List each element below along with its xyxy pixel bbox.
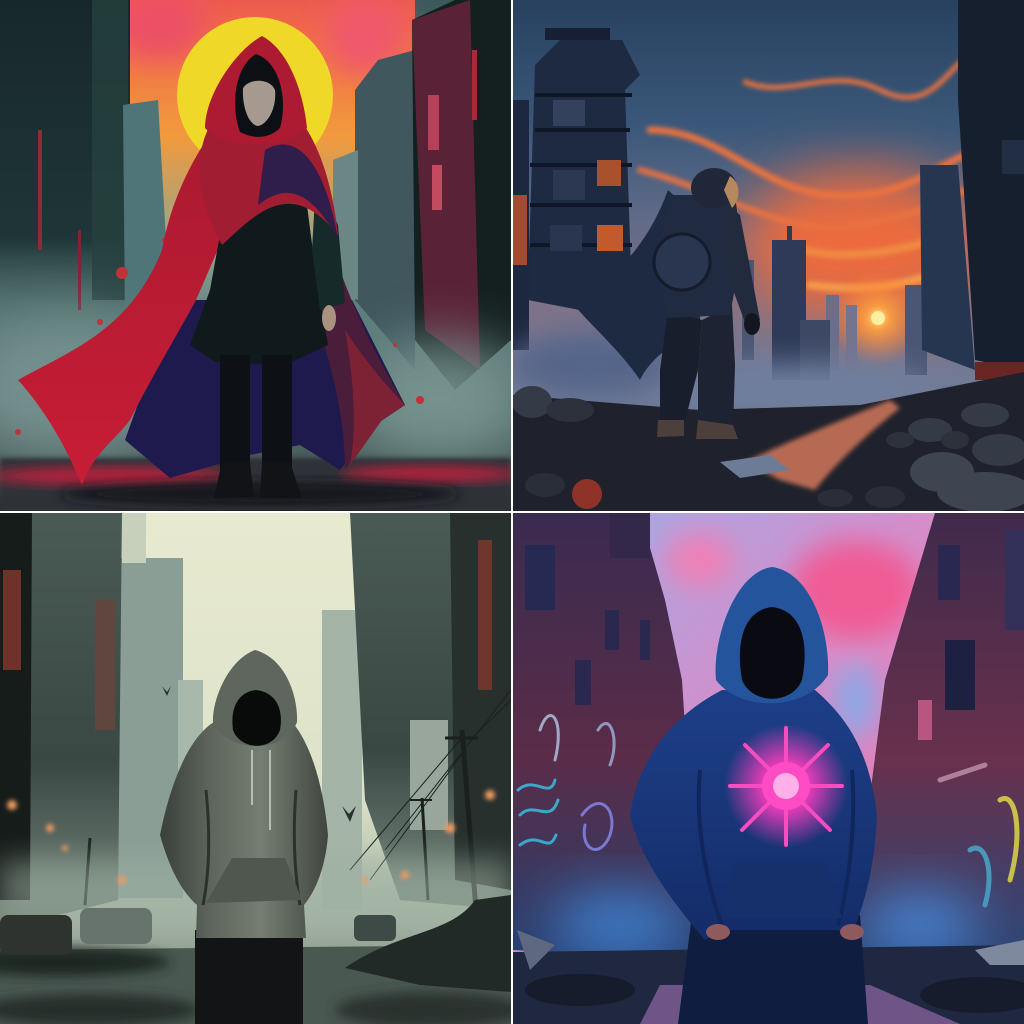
arm creases — [203, 790, 300, 905]
yellow sun disc — [177, 17, 333, 150]
hands in pockets — [706, 924, 864, 940]
hooded figure — [160, 650, 328, 1024]
hood — [716, 567, 828, 703]
arm — [734, 212, 760, 320]
arm — [312, 212, 345, 310]
red cloak sweep left — [18, 146, 219, 485]
panel: grey hoodie in foggy city — [0, 513, 525, 1024]
orange sunset sky — [115, 0, 415, 300]
setting sun — [839, 288, 905, 362]
boots — [657, 420, 684, 437]
hood — [205, 36, 307, 144]
large tower left — [513, 28, 640, 350]
boots — [214, 462, 254, 498]
cape — [568, 190, 700, 380]
street and rubble — [513, 930, 1024, 1024]
dark inner cloak — [125, 300, 405, 478]
hoodie body — [630, 690, 877, 940]
orange sky glow — [740, 170, 980, 320]
left buildings — [0, 513, 122, 930]
wet road — [0, 945, 525, 1024]
paint splatter — [15, 237, 424, 435]
blue mist — [510, 333, 930, 407]
fog band — [0, 860, 511, 920]
panel: blue hoodie with glowing emblem — [513, 513, 1024, 1024]
right side buildings — [920, 0, 1024, 380]
cloaked figure — [18, 36, 405, 498]
hood shadow — [232, 690, 281, 746]
torso — [668, 195, 738, 318]
astronaut figure — [568, 168, 760, 439]
trousers — [195, 930, 303, 1024]
legs — [660, 316, 702, 409]
distant skyline — [742, 226, 927, 380]
middle left tower — [123, 100, 166, 306]
right cloak edge — [322, 278, 405, 470]
roadside bush — [345, 895, 511, 992]
drifting fog — [0, 320, 530, 460]
rubble ground — [513, 372, 1024, 511]
rocks — [512, 386, 1024, 512]
glove — [744, 313, 760, 335]
pouch pocket — [722, 860, 842, 918]
right side towers — [333, 0, 511, 390]
drawstrings — [252, 750, 270, 830]
left brick building — [513, 513, 700, 960]
pink sky clouds — [665, 532, 920, 740]
parked cars — [0, 908, 396, 955]
hooded figure — [630, 567, 877, 1024]
right brick building — [850, 513, 1024, 960]
orange sky streaks — [640, 55, 970, 288]
red sphere — [572, 479, 602, 509]
red shawl — [200, 122, 338, 245]
panel: red cloaked figure — [0, 0, 530, 511]
distant towers — [115, 513, 362, 910]
face — [243, 81, 275, 126]
hood shadow — [740, 607, 805, 699]
birds — [162, 686, 356, 822]
street lights — [7, 790, 495, 884]
hood — [213, 650, 297, 746]
legs — [220, 355, 250, 470]
panel: astronaut in ruined city — [510, 0, 1024, 512]
pocket — [206, 858, 302, 903]
round backpack — [654, 234, 710, 290]
graffiti — [518, 716, 1017, 905]
blue mist — [550, 893, 980, 957]
ground — [0, 458, 520, 511]
black dress — [190, 190, 328, 365]
hand — [322, 305, 336, 331]
glowing emblem — [724, 724, 848, 848]
sleeve folds — [699, 770, 853, 925]
left dark tower — [0, 0, 130, 340]
right buildings — [350, 513, 511, 910]
helmet — [691, 168, 737, 208]
jeans — [678, 915, 868, 1024]
utility poles and wires — [85, 690, 511, 910]
hoodie body — [160, 722, 328, 938]
